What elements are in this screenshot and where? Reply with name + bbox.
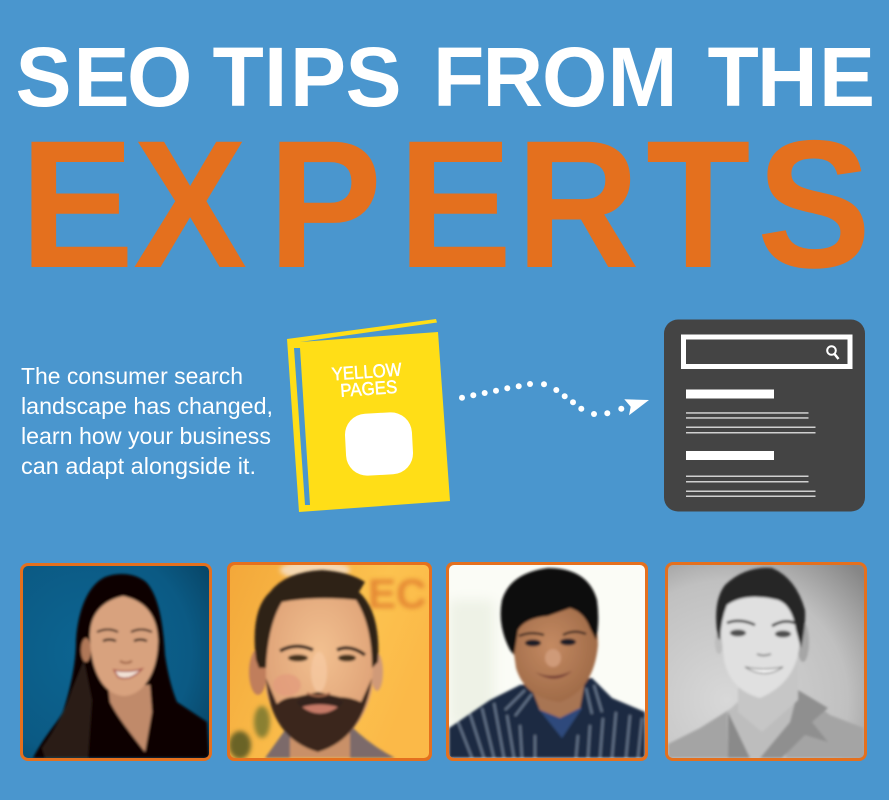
intro text block: learn how your business <box>21 423 271 449</box>
title line: SEO tips from the: SEO TIPS FROM THE <box>16 30 875 124</box>
result two <box>686 451 816 497</box>
book title: YELLOW <box>331 359 403 384</box>
intro text block: can adapt alongside it. <box>21 453 256 479</box>
title line: experts: EXPERTS <box>20 103 871 306</box>
panel: search results page <box>664 320 865 512</box>
icon: magnifying glass <box>827 346 838 359</box>
arrow: dotted path from book to search page <box>459 381 649 417</box>
search box <box>684 337 850 366</box>
title <box>16 30 875 306</box>
portrait 4: man in blazer, black and white <box>665 562 867 761</box>
book cover white badge <box>344 411 414 477</box>
book title <box>331 359 404 401</box>
intro text block: landscape has changed, <box>21 393 273 419</box>
blurred sign in background: EC <box>368 570 426 617</box>
portrait 2: bearded man on orange <box>227 560 432 761</box>
book title: PAGES <box>340 376 398 401</box>
result one <box>686 390 816 434</box>
icon: yellow pages book <box>287 319 450 512</box>
portrait 3: smiling man in striped shirt on white <box>446 562 648 761</box>
portrait 1: woman with long dark hair on blue <box>20 563 212 761</box>
intro text block: The consumer search <box>21 363 243 389</box>
